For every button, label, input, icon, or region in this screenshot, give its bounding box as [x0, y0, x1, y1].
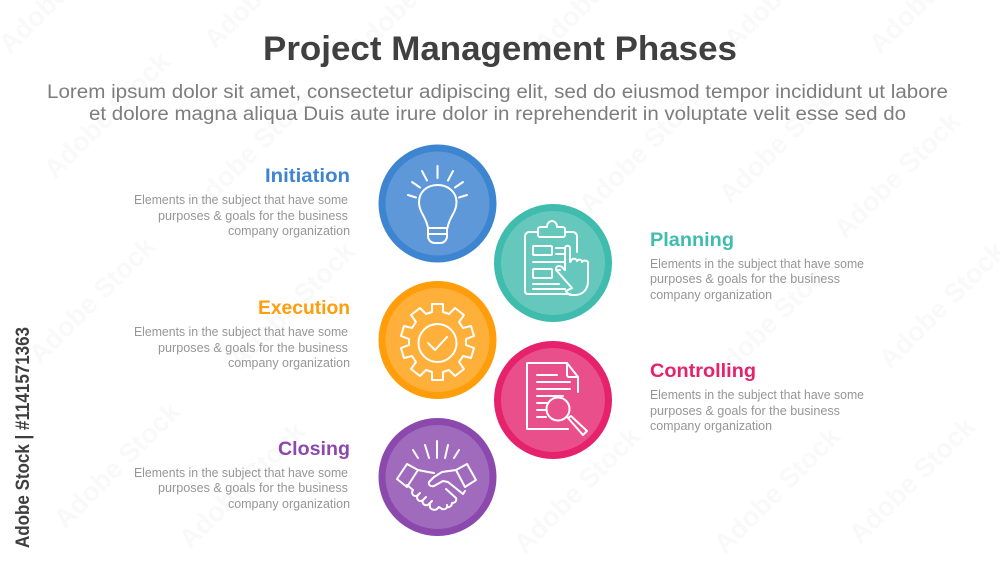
- description: execution: purposes & goals for the business: [158, 341, 348, 355]
- text: Adobe Stock: [828, 106, 967, 244]
- icon: document with magnifier: [527, 363, 587, 435]
- text: Adobe Stock: [173, 416, 312, 554]
- description: controlling: Elements in the subject that have some: [650, 388, 864, 402]
- description: planning: [650, 257, 864, 302]
- text: Adobe Stock: [508, 421, 647, 559]
- description: controlling: [650, 388, 864, 433]
- description: planning: Elements in the subject that have some: [650, 257, 864, 271]
- heading: planning: Planning: [650, 230, 734, 251]
- subtitle text block: Lorem ipsum dolor sit amet, consectetur adipiscing elit, sed do eiusmod tempor incididunt ut labore: [47, 82, 948, 103]
- description: closing: Elements in the subject that have some: [134, 466, 348, 480]
- heading: closing: Closing: [278, 439, 350, 460]
- heading: initiation: Initiation: [265, 166, 350, 187]
- text: Adobe Stock: [183, 81, 322, 219]
- circle: controlling: [494, 341, 612, 459]
- subtitle text block: [47, 82, 948, 125]
- circle: initiation: [378, 144, 496, 262]
- panel: initiation text: [134, 166, 350, 238]
- icon: gear with check: [401, 304, 474, 380]
- description: planning: company organization: [650, 288, 772, 302]
- description: initiation: [134, 193, 350, 238]
- text: Adobe Stock: [48, 396, 187, 534]
- description: execution: Elements in the subject that have some: [134, 325, 348, 339]
- description: initiation: company organization: [228, 224, 350, 238]
- description: controlling: purposes & goals for the business: [650, 404, 840, 418]
- panel: closing text: [134, 439, 350, 511]
- panel: planning text: [650, 230, 864, 302]
- heading: controlling: Controlling: [650, 361, 756, 382]
- text: Adobe Stock: [38, 46, 177, 184]
- text: Adobe Stock: [573, 81, 712, 219]
- watermark: adobe stock id: Adobe Stock | #1141571363: [13, 327, 34, 548]
- description: closing: purposes & goals for the business: [158, 481, 348, 495]
- text: Adobe Stock: [703, 251, 842, 389]
- panel: execution text: [134, 298, 350, 370]
- text: Adobe Stock: [223, 236, 362, 374]
- text: Adobe Stock: [708, 421, 847, 559]
- description: controlling: company organization: [650, 419, 772, 433]
- description: closing: [134, 466, 350, 511]
- subtitle text block: et dolore magna aliqua Duis aute irure dolor in reprehenderit in voluptate velit esse sed do: [89, 104, 906, 125]
- description: initiation: Elements in the subject that have some: [134, 193, 348, 207]
- description: execution: company organization: [228, 356, 350, 370]
- description: planning: purposes & goals for the business: [650, 272, 840, 286]
- description: initiation: purposes & goals for the business: [158, 209, 348, 223]
- description: execution: [134, 325, 350, 370]
- description: closing: company organization: [228, 497, 350, 511]
- circle: execution: [378, 281, 496, 399]
- text: Adobe Stock: [843, 411, 982, 549]
- icon: clipboard with hand: [525, 221, 588, 295]
- text: Adobe Stock: [23, 231, 162, 369]
- circle: planning: [494, 204, 612, 322]
- panel: controlling text: [650, 361, 864, 433]
- text: Adobe Stock: [713, 71, 852, 209]
- icon: handshake: [397, 441, 476, 510]
- title: Project Management Phases: [263, 30, 737, 68]
- icon: light bulb: [408, 166, 467, 243]
- heading: execution: Execution: [258, 298, 350, 319]
- circle: closing: [378, 418, 496, 536]
